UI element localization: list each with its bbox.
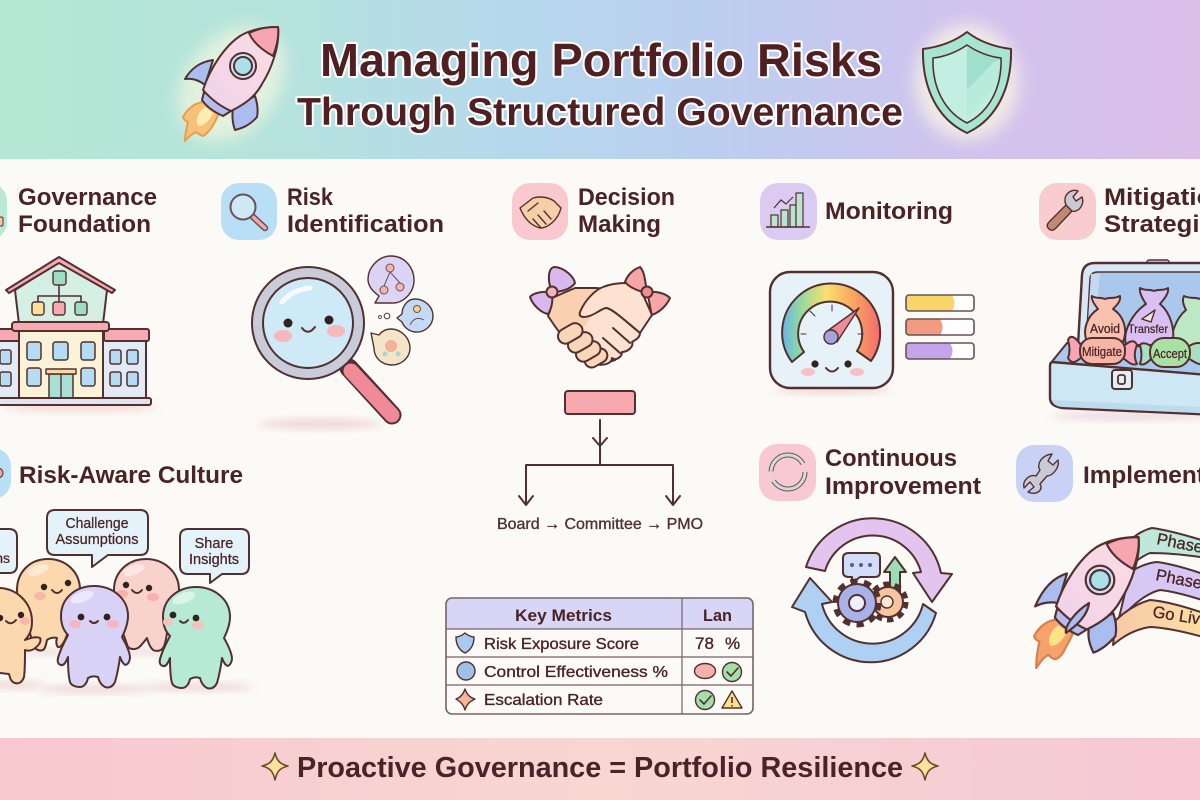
- footer banner: [0, 738, 1200, 800]
- heading: risk identification: Risk: [287, 184, 334, 211]
- illustration: magnifier character: [252, 256, 433, 429]
- character: lavender front: [58, 586, 130, 687]
- heading: decision making: Making: [578, 211, 661, 238]
- speech bubble: challenge assumptions: Challenge: [66, 516, 128, 532]
- candy: mitigate: Mitigate: [1082, 345, 1122, 359]
- icon: left sparkle: [262, 753, 288, 780]
- table: key metrics: Risk Exposure Score: [484, 636, 639, 653]
- speech bubble: share insights: [180, 529, 249, 583]
- speech bubble: left: [0, 529, 17, 573]
- table: key metrics: Lan: [703, 606, 732, 625]
- heading: governance foundation: Governance: [18, 184, 157, 211]
- icon: warning triangle: [722, 691, 742, 708]
- character: pink back: [114, 559, 179, 651]
- header banner: [0, 0, 1200, 159]
- speech bubble: challenge assumptions: Assumptions: [56, 532, 138, 548]
- flow chart: escalation path: Board → Committee → PMO: [497, 516, 703, 533]
- title: Through Structured Governance: [297, 91, 903, 134]
- icon: green check: [722, 662, 742, 682]
- illustration: improvement cycle: [792, 518, 952, 662]
- icon: blue circle: [457, 662, 475, 680]
- section: mitigation strategies: [1039, 183, 1200, 420]
- ribbon: phase 2: [1118, 562, 1200, 622]
- rocket: [1034, 537, 1139, 668]
- character: peach front: [0, 588, 41, 683]
- icon tile: culture: [0, 448, 11, 499]
- bag: transfer: [1125, 288, 1173, 345]
- icon tile: governance: [0, 183, 7, 240]
- section: decision making: [446, 183, 753, 714]
- candy: accept: [1140, 338, 1200, 367]
- heading: continuous improvement: Continuous: [825, 445, 957, 472]
- icon tile: wrench: [1039, 183, 1096, 240]
- speech bubble: share insights: Insights: [189, 552, 239, 568]
- illustration: toolbox with candy bags: [1050, 260, 1200, 420]
- bag: transfer: Transfer: [1128, 322, 1168, 336]
- icon tile: handshake: [512, 183, 568, 240]
- character: peach back: [17, 559, 80, 650]
- section: implementation: [1016, 445, 1200, 668]
- heading: decision making: Decision: [578, 184, 675, 211]
- table: key metrics: [446, 598, 753, 714]
- icon tile: bar chart: [760, 183, 817, 240]
- section: risk identification: [221, 183, 444, 429]
- icon tile: cycle: [759, 444, 816, 501]
- status bars: [906, 295, 974, 359]
- icon tile: magnifier: [221, 183, 277, 240]
- bag: avoid: [1085, 296, 1125, 342]
- section: risk-aware culture: [0, 448, 254, 693]
- ribbon: phase 1: [1130, 528, 1200, 566]
- candy: accept: Accept: [1153, 347, 1187, 361]
- icon: header rocket: [156, 5, 308, 163]
- illustration: building: [0, 257, 158, 412]
- speech bubble: share insights: Share: [195, 536, 233, 552]
- icon: orange burst: [456, 689, 475, 710]
- speech bubble: challenge assumptions: [47, 510, 148, 567]
- footer text: Proactive Governance = Portfolio Resilience: [297, 752, 903, 784]
- icon: right sparkle: [912, 753, 938, 780]
- section: monitoring: [760, 183, 974, 394]
- illustration: handshake with bows: [530, 267, 670, 370]
- candy: mitigate: [1068, 337, 1137, 365]
- heading: monitoring: Monitoring: [825, 198, 953, 225]
- heading: governance foundation: Foundation: [18, 211, 151, 238]
- title: [297, 34, 903, 134]
- section: continuous improvement: [759, 444, 981, 662]
- table: key metrics: %: [725, 634, 740, 653]
- toolbox front: [1050, 362, 1200, 415]
- footer message: [262, 752, 938, 784]
- illustration: rocket with phases: [1034, 528, 1200, 668]
- icon: shield: [915, 24, 1019, 140]
- icon: green check two: [696, 690, 714, 710]
- heading: risk-aware culture: Risk-Aware Culture: [19, 462, 243, 489]
- illustration: character group: [0, 510, 254, 693]
- bag: green: [1170, 296, 1200, 350]
- bag: avoid: Avoid: [1090, 322, 1120, 336]
- illustration: gauge: [770, 272, 974, 394]
- title: Managing Portfolio Risks: [320, 34, 882, 86]
- character: mint front: [160, 587, 232, 688]
- section: governance foundation: [0, 183, 158, 412]
- table: key metrics: Key Metrics: [515, 606, 612, 625]
- heading: continuous improvement: Improvement: [825, 473, 981, 500]
- table: key metrics: 78: [695, 634, 714, 653]
- icon: pink blob: [694, 664, 716, 678]
- table: key metrics: Control Effectiveness %: [484, 664, 668, 681]
- table: key metrics: Escalation Rate: [484, 692, 603, 709]
- icon tile: wrench pair: [1016, 445, 1073, 502]
- flow chart: escalation path: [497, 391, 703, 533]
- heading: risk identification: Identification: [287, 211, 444, 238]
- icon: blue shield: [456, 633, 474, 653]
- ribbon: go live: [1113, 600, 1200, 645]
